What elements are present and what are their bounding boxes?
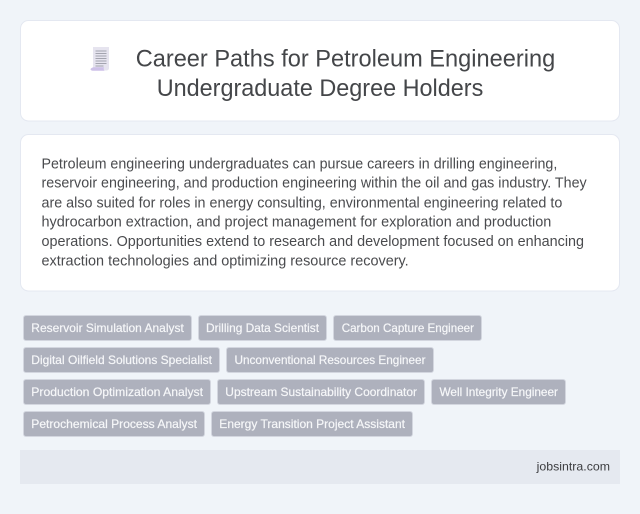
tag: Drilling Data Scientist: Drilling Data Scientist (206, 321, 320, 335)
panel: description card (20, 134, 620, 291)
heading (136, 46, 555, 102)
tag: Unconventional Resources Engineer (226, 348, 434, 372)
tag: Production Optimization Analyst: Production Optimization Analyst (31, 385, 204, 399)
tag: Energy Transition Project Assistant: Energy Transition Project Assistant (219, 417, 406, 431)
text block: description: operations. Opportunities extend to research and development focused on enhancing (42, 234, 584, 250)
tag: Unconventional Resources Engineer: Unconventional Resources Engineer (234, 353, 426, 367)
panel: title card (20, 20, 620, 121)
text block: description (42, 156, 587, 269)
tag: Petrochemical Process Analyst: Petrochemical Process Analyst (31, 417, 198, 431)
tag: Digital Oilfield Solutions Specialist (24, 348, 220, 372)
text block: description: Petroleum engineering undergraduates can pursue careers in drilling engineering, (42, 156, 557, 172)
tag: Petrochemical Process Analyst (24, 412, 204, 436)
tag: Carbon Capture Engineer (334, 316, 482, 340)
text block: description: reservoir engineering, and production engineering within the oil and gas industry. They (42, 176, 587, 192)
tag list (24, 316, 566, 436)
tag: Production Optimization Analyst (24, 380, 210, 404)
tag: Well Integrity Engineer: Well Integrity Engineer (440, 385, 558, 399)
footer source text: jobsintra.com (536, 460, 610, 474)
tag: Reservoir Simulation Analyst: Reservoir Simulation Analyst (31, 321, 184, 335)
text block: description: are also suited for roles in energy consulting, environmental engineering related to (42, 195, 562, 211)
tag: Well Integrity Engineer (432, 380, 566, 404)
icon: document scroll (90, 47, 109, 71)
tag: Upstream Sustainability Coordinator: Upstream Sustainability Coordinator (225, 385, 417, 399)
tag: Digital Oilfield Solutions Specialist: Digital Oilfield Solutions Specialist (31, 353, 213, 367)
text block: description: extraction technologies and optimizing resource recovery. (42, 253, 409, 269)
tag: Carbon Capture Engineer: Carbon Capture Engineer (342, 321, 474, 335)
tag: Upstream Sustainability Coordinator (218, 380, 424, 404)
tag: Energy Transition Project Assistant (212, 412, 412, 436)
tag: Drilling Data Scientist (198, 316, 326, 340)
heading: Undergraduate Degree Holders (157, 75, 483, 102)
text block: description: hydrocarbon extraction, and project management for exploration and production (42, 214, 551, 230)
tag: Reservoir Simulation Analyst (24, 316, 192, 340)
heading: Career Paths for Petroleum Engineering (136, 46, 555, 73)
footer bar (20, 450, 620, 484)
